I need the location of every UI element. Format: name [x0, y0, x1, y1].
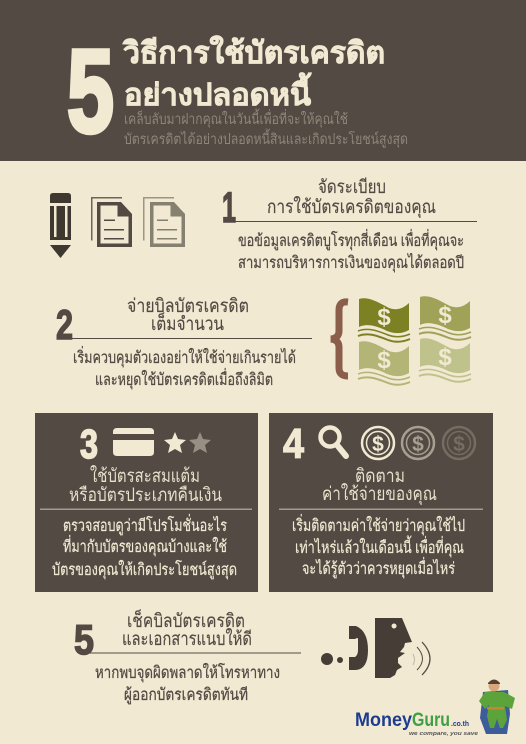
icon: bill palest: $	[438, 344, 452, 371]
icon: credit card	[113, 428, 154, 456]
body text: สามารถบริหารการเงินของคุณได้ตลอดปี	[238, 253, 464, 273]
heading: ติดตาม	[355, 465, 405, 486]
title: วิธีการใช้บัตรเครดิต	[122, 35, 385, 70]
panel: step 5	[74, 608, 430, 705]
heading: จัดระเบียบ	[318, 176, 386, 197]
body text: ตรวจสอบดูว่ามีโปรโมชั่นอะไร	[63, 514, 227, 536]
icon: star grey	[189, 432, 211, 453]
icon: coin faint: $	[453, 433, 465, 456]
icon: brace	[331, 302, 348, 376]
title: อย่างปลอดหนี้	[124, 72, 312, 112]
heading: การใช้บัตรเครดิตของคุณ	[267, 196, 436, 219]
heading: เช็คบิลบัตรเครดิต	[127, 608, 245, 631]
body text: และหยุดใช้บัตรเครดิตเมื่อถึงลิมิต	[95, 368, 273, 390]
icon: bill palest	[419, 338, 471, 382]
body text	[238, 229, 464, 273]
number 3: 3	[80, 421, 98, 467]
icon: phone call and speaking head	[321, 618, 430, 678]
heading	[127, 295, 249, 334]
logo: MoneyGuru: Guru	[412, 710, 450, 731]
icon: document light	[143, 197, 185, 247]
panel: step 3	[35, 413, 258, 592]
icon: coin bright	[362, 427, 394, 459]
heading: จ่ายบิลบัตรเครดิต	[127, 295, 249, 316]
body text: ที่มากับบัตรของคุณบ้างและใช้	[63, 535, 227, 557]
logo: MoneyGuru	[355, 710, 478, 737]
number 4: 4	[283, 420, 305, 467]
number 5: 5	[74, 616, 94, 663]
icon: coin faint	[443, 427, 475, 459]
heading: เต็มจำนวน	[151, 311, 224, 334]
logo: MoneyGuru: Money	[355, 710, 412, 731]
logo: MoneyGuru: .co.th	[451, 721, 469, 728]
body text: ขอข้อมูลเครดิตบูโรทุกสี่เดือน เพื่อที่คุณจะ	[238, 229, 464, 251]
heading: หรือบัตรประเภทคืนเงิน	[69, 484, 222, 505]
icon: magnifier	[320, 428, 346, 456]
title	[122, 35, 385, 112]
logo: MoneyGuru: we compare, you save	[409, 731, 478, 737]
icon: coin medium: $	[412, 433, 424, 456]
icon: bill dark: $	[377, 304, 391, 331]
body text: บัตรของคุณให้เกิดประโยชน์สูงสุด	[52, 560, 237, 580]
icon: bill light	[358, 341, 410, 385]
icon: star light	[164, 432, 186, 453]
icon: bill dark	[358, 298, 410, 342]
subtitle: เคล็บลับมาฝากคุณในวันนี้เพื่อที่จะให้คุณใช้	[124, 108, 348, 128]
big number 5: 5	[67, 26, 114, 158]
body text: เท่าไหร่แล้วในเดือนนี้ เพื่อที่คุณ	[295, 535, 464, 558]
panel: step 2	[56, 295, 471, 390]
heading	[69, 465, 222, 505]
heading: และเอกสารแนบให้ดี	[122, 628, 252, 649]
heading	[122, 608, 252, 649]
panel: header	[0, 0, 526, 161]
heading	[322, 465, 437, 506]
body text: เริ่มควบคุมตัวเองอย่าให้ใช้จ่ายเกินรายได้	[73, 346, 296, 368]
body text	[95, 663, 280, 705]
icon: coin medium	[402, 427, 434, 459]
icon: bill light: $	[377, 347, 391, 374]
icon: bill medium	[419, 296, 471, 340]
number 1: 1	[222, 184, 236, 232]
body text	[73, 346, 296, 390]
icon: coin bright: $	[372, 433, 384, 456]
panel: step 1	[50, 176, 477, 273]
heading	[267, 176, 436, 219]
body text: ผู้ออกบัตรเครดิตทันที	[124, 686, 248, 705]
icon: document dark	[91, 197, 132, 247]
panel: step 4	[269, 413, 493, 592]
body text: เริ่มติดตามค่าใช้จ่ายว่าคุณใช้ไป	[292, 514, 465, 536]
heading: ใช้บัตรสะสมแต้ม	[90, 465, 200, 486]
subtitle: บัตรเครดิตได้อย่างปลอดหนี้สินและเกิดประโยชน์สูงสุด	[124, 128, 408, 148]
subtitle	[124, 108, 408, 148]
icon: superhero mascot	[479, 680, 515, 734]
body text	[292, 514, 465, 579]
body text: จะได้รู้ตัวว่าควรหยุดเมื่อไหร่	[302, 557, 455, 579]
number 2: 2	[56, 301, 73, 348]
icon: bill medium: $	[438, 302, 452, 329]
body text: หากพบจุดผิดพลาดให้โทรหาทาง	[95, 663, 280, 683]
icon: pencil	[50, 193, 71, 258]
body text	[52, 514, 237, 580]
heading: ค่าใช้จ่ายของคุณ	[322, 483, 437, 506]
